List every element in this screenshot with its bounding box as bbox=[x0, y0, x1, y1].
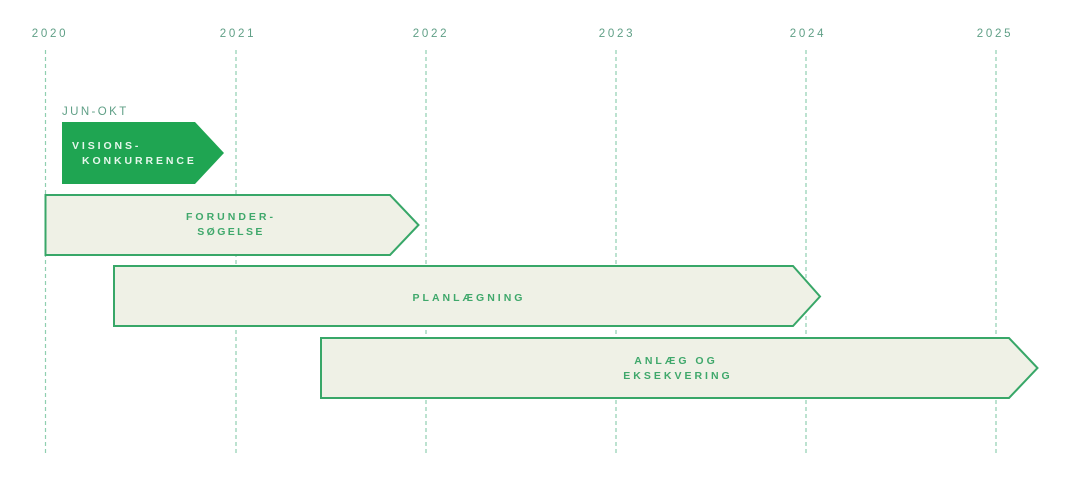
phase: visionskonkurrence: VISIONS- bbox=[72, 140, 141, 152]
phase: planlægning bbox=[114, 266, 820, 326]
year 2023: 2023 bbox=[599, 28, 635, 40]
phase: visionskonkurrence: KONKURRENCE bbox=[82, 155, 197, 167]
period label: JUN-OKT bbox=[62, 106, 129, 118]
phase: visionskonkurrence bbox=[62, 122, 224, 184]
year 2020: 2020 bbox=[32, 28, 68, 40]
phase: anlæg og eksekvering: EKSEKVERING bbox=[623, 370, 733, 382]
phase: anlæg og eksekvering bbox=[321, 338, 1038, 398]
phase: forundersøgelse: SØGELSE bbox=[197, 226, 265, 238]
year 2024: 2024 bbox=[790, 28, 826, 40]
year 2022: 2022 bbox=[413, 28, 449, 40]
year 2025: 2025 bbox=[977, 28, 1013, 40]
phase: planlægning: PLANLÆGNING bbox=[413, 292, 525, 304]
phase: anlæg og eksekvering: ANLÆG OG bbox=[634, 355, 718, 367]
phase: forundersøgelse bbox=[46, 195, 418, 255]
year 2021: 2021 bbox=[220, 28, 256, 40]
phase: forundersøgelse: FORUNDER- bbox=[186, 211, 276, 223]
year axis bbox=[32, 28, 1013, 455]
